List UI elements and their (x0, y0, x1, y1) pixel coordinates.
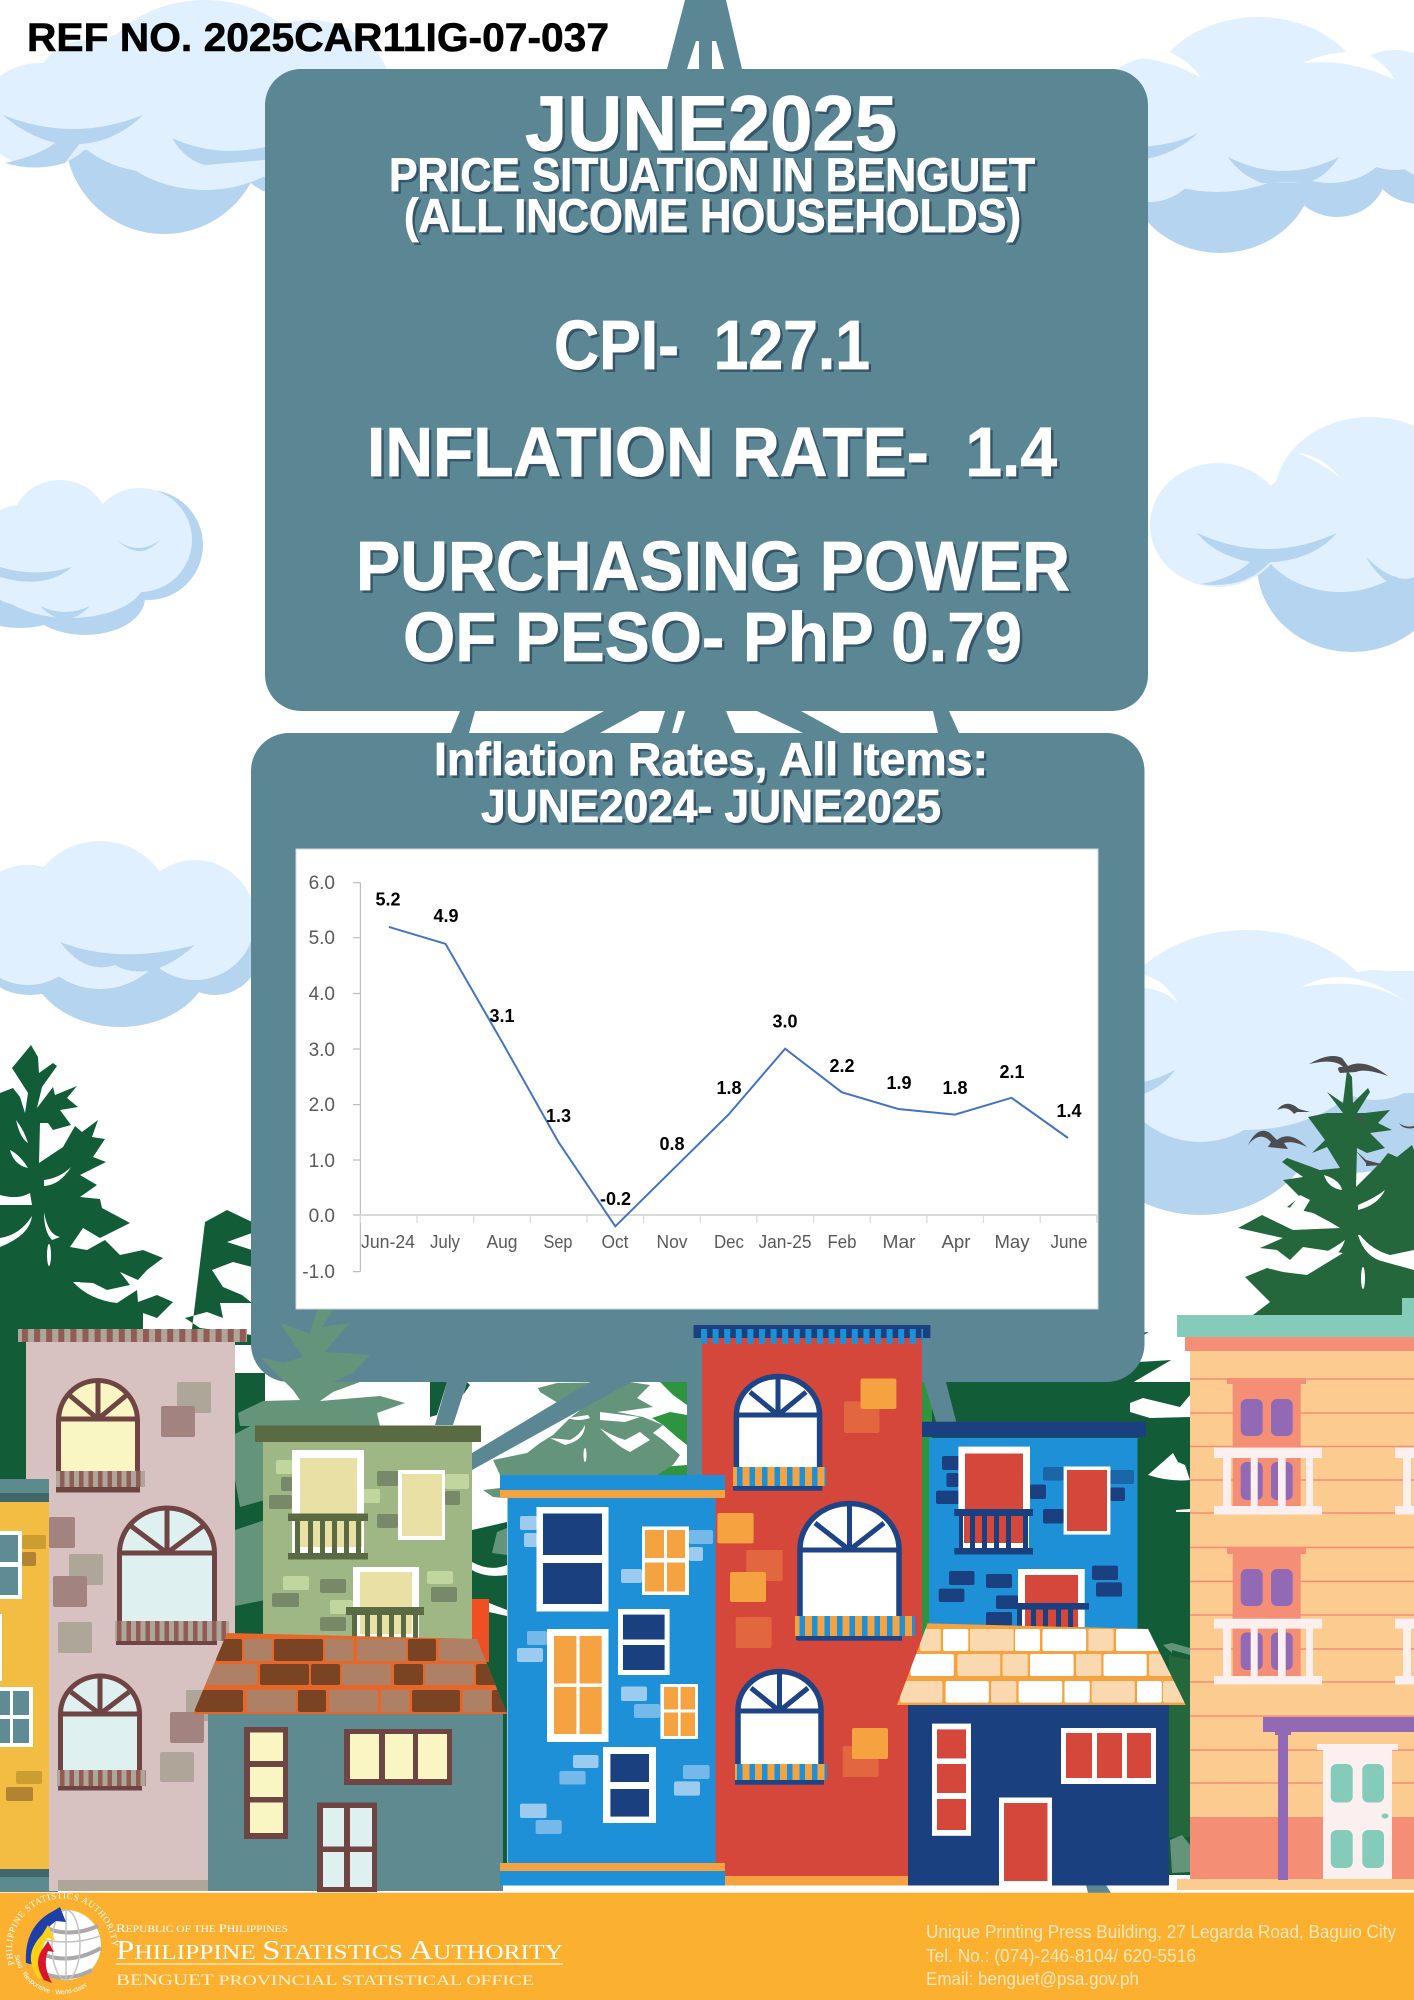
data labels: 2.1 (999, 1062, 1025, 1082)
inflation line (389, 927, 1068, 1226)
cloud: lower right (1075, 930, 1414, 1215)
data labels: -0.2 (600, 1189, 631, 1209)
y axis labels: 0.0 (309, 1206, 335, 1227)
x axis labels: Sep (544, 1232, 572, 1252)
y axis labels: 6.0 (309, 873, 335, 894)
x axis labels: Nov (656, 1232, 688, 1252)
brick roof (193, 1633, 507, 1714)
y axis labels (302, 873, 335, 1283)
y axis labels: 5.0 (309, 928, 335, 949)
window navy lower (603, 1747, 656, 1823)
house: blue right with pale roof (897, 1422, 1186, 1886)
data labels: 3.1 (489, 1006, 515, 1026)
pale tile roof (897, 1623, 1186, 1705)
cloud: middle right (1150, 417, 1414, 652)
tree fill between green and blue houses (430, 1382, 932, 1885)
upper window block (1214, 1378, 1322, 1514)
y axis labels: -1.0 (302, 1262, 335, 1283)
icon: tree far left (0, 1045, 173, 1480)
arched window top (733, 1376, 826, 1490)
stat: purchasing power line 1: PURCHASING POWER (356, 527, 1070, 605)
contact details: Email: benguet@psa.gov.ph (926, 1969, 1139, 1989)
cloud: lower left (0, 841, 260, 1027)
right partial balconies (1395, 1448, 1414, 1684)
window tall orange (547, 1629, 608, 1742)
white gaps in right tree (1130, 1395, 1190, 1512)
data labels: 1.8 (716, 1078, 742, 1098)
balcony window 1 (288, 1450, 368, 1560)
agency name: REPUBLIC OF THE PHILIPPINES (116, 1921, 288, 1935)
window navy middle (618, 1609, 670, 1675)
house: green (255, 1426, 481, 1640)
x axis labels: July (430, 1232, 460, 1252)
door (999, 1798, 1052, 1886)
window small orange lower (660, 1684, 698, 1739)
lower right tree shading (1163, 1643, 1190, 1873)
cloud: top left (0, 0, 395, 234)
strip behind roof (472, 1599, 489, 1662)
cloud: middle left (0, 480, 203, 635)
y axis labels: 3.0 (309, 1040, 335, 1061)
house: red tower (694, 1325, 930, 1886)
agency name: BENGUET PROVINCIAL STATISTICAL OFFICE (116, 1972, 534, 1989)
data labels: 1.3 (546, 1106, 571, 1126)
x axis labels: May (994, 1232, 1030, 1252)
data labels: 4.9 (433, 906, 459, 926)
x axis labels: Feb (828, 1232, 856, 1252)
arched window 2 (115, 1508, 229, 1645)
house: teal with brick roof (193, 1633, 507, 1892)
window small orange (642, 1526, 689, 1595)
arched window bottom (735, 1670, 827, 1784)
x axis labels: June (1050, 1232, 1088, 1252)
subtitle line 2: (ALL INCOME HOUSEHOLDS) (404, 189, 1021, 242)
chart heading line 1: Inflation Rates, All Items: (434, 733, 988, 785)
stat: CPI: CPI- 127.1 (554, 306, 870, 384)
y axis labels: 1.0 (309, 1151, 335, 1172)
data labels: 1.9 (886, 1073, 912, 1093)
arched window middle (795, 1503, 915, 1640)
panel: key indicators (265, 69, 1148, 711)
agency name: PHILIPPINE STATISTICS AUTHORITY (116, 1935, 563, 1965)
data labels: 0.8 (659, 1134, 685, 1154)
x axis labels (361, 1232, 1088, 1252)
stat: purchasing power line 2: OF PESO- PhP 0.79 (403, 598, 1022, 676)
icon: birds (1248, 1056, 1414, 1166)
door (1317, 1744, 1398, 1879)
lower window block (1214, 1548, 1322, 1684)
window 2 (398, 1470, 445, 1540)
data labels: 1.8 (942, 1078, 968, 1098)
x axis labels: Apr (942, 1232, 971, 1252)
x axis labels: Jun-24 (361, 1232, 415, 1252)
data labels: 1.4 (1056, 1101, 1082, 1121)
icon: PSA logo: PHILIPPINE STATISTICS AUTHORITY (6, 1892, 118, 1966)
window tall navy (536, 1507, 608, 1612)
balcony window C (1017, 1569, 1089, 1629)
line chart (296, 849, 1098, 1309)
house: blue (500, 1475, 725, 1886)
stat: inflation rate: INFLATION RATE- 1.4 (367, 413, 1057, 491)
cloud: top right (1090, 17, 1414, 253)
icon: light tree over panel (238, 1310, 405, 1426)
contact details: Tel. No.: (074)-246-8104/ 620-5516 (926, 1946, 1196, 1966)
tree highlights (0, 1120, 117, 1303)
chart heading line 2: JUNE2024- JUNE2025 (481, 780, 941, 832)
y axis labels: 2.0 (309, 1095, 335, 1116)
tower top (667, 0, 742, 69)
house: peach right (1177, 1298, 1414, 1890)
right tree highlights (1284, 1175, 1414, 1289)
subtitle line 1: PRICE SITUATION IN BENGUET (389, 148, 1035, 201)
x axis labels: Dec (714, 1232, 744, 1252)
x axis labels: Aug (486, 1232, 518, 1252)
panel: inflation chart (251, 733, 1144, 1382)
icon: tree left of panel (185, 1210, 265, 1640)
y axis labels: 4.0 (309, 984, 335, 1005)
door (317, 1802, 377, 1892)
title: JUNE2025 (525, 79, 897, 167)
porch (1263, 1717, 1414, 1880)
reference number: REF NO. 2025CAR11IG-07-037 (27, 16, 609, 60)
connector legs between panels (451, 711, 959, 733)
agency name (116, 1921, 563, 1989)
house: yellow (0, 1479, 58, 1892)
legs below chart panel (435, 1382, 1111, 1893)
x axis labels: Oct (602, 1232, 628, 1252)
data labels: 3.0 (772, 1012, 798, 1032)
data labels (375, 890, 1082, 1209)
window B (1064, 1466, 1110, 1535)
icon: tree behind right (1238, 1070, 1414, 1315)
icon: PSA logo: Solid · Responsive · World-class (14, 1954, 87, 1994)
y axis (353, 883, 360, 1272)
icon: dark tree right of panel (880, 1230, 1200, 1885)
balcony window A (954, 1447, 1033, 1554)
data labels: 2.2 (829, 1056, 855, 1076)
tree bands left of green house (235, 1420, 265, 1606)
x axis labels: Mar (882, 1232, 916, 1252)
footer band (0, 1892, 1414, 2000)
arched window 1 (56, 1380, 145, 1490)
data labels: 5.2 (375, 890, 401, 910)
arched window 3 (57, 1676, 146, 1790)
x axis labels: Jan-25 (758, 1232, 812, 1252)
icon: PSA logo (6, 1892, 118, 1994)
contact details (926, 1922, 1396, 1989)
house: pink (18, 1329, 247, 1891)
x axis (360, 1215, 1097, 1223)
balcony window 3 (346, 1567, 424, 1640)
contact details: Unique Printing Press Building, 27 Legarda Road, Baguio City (926, 1922, 1396, 1942)
